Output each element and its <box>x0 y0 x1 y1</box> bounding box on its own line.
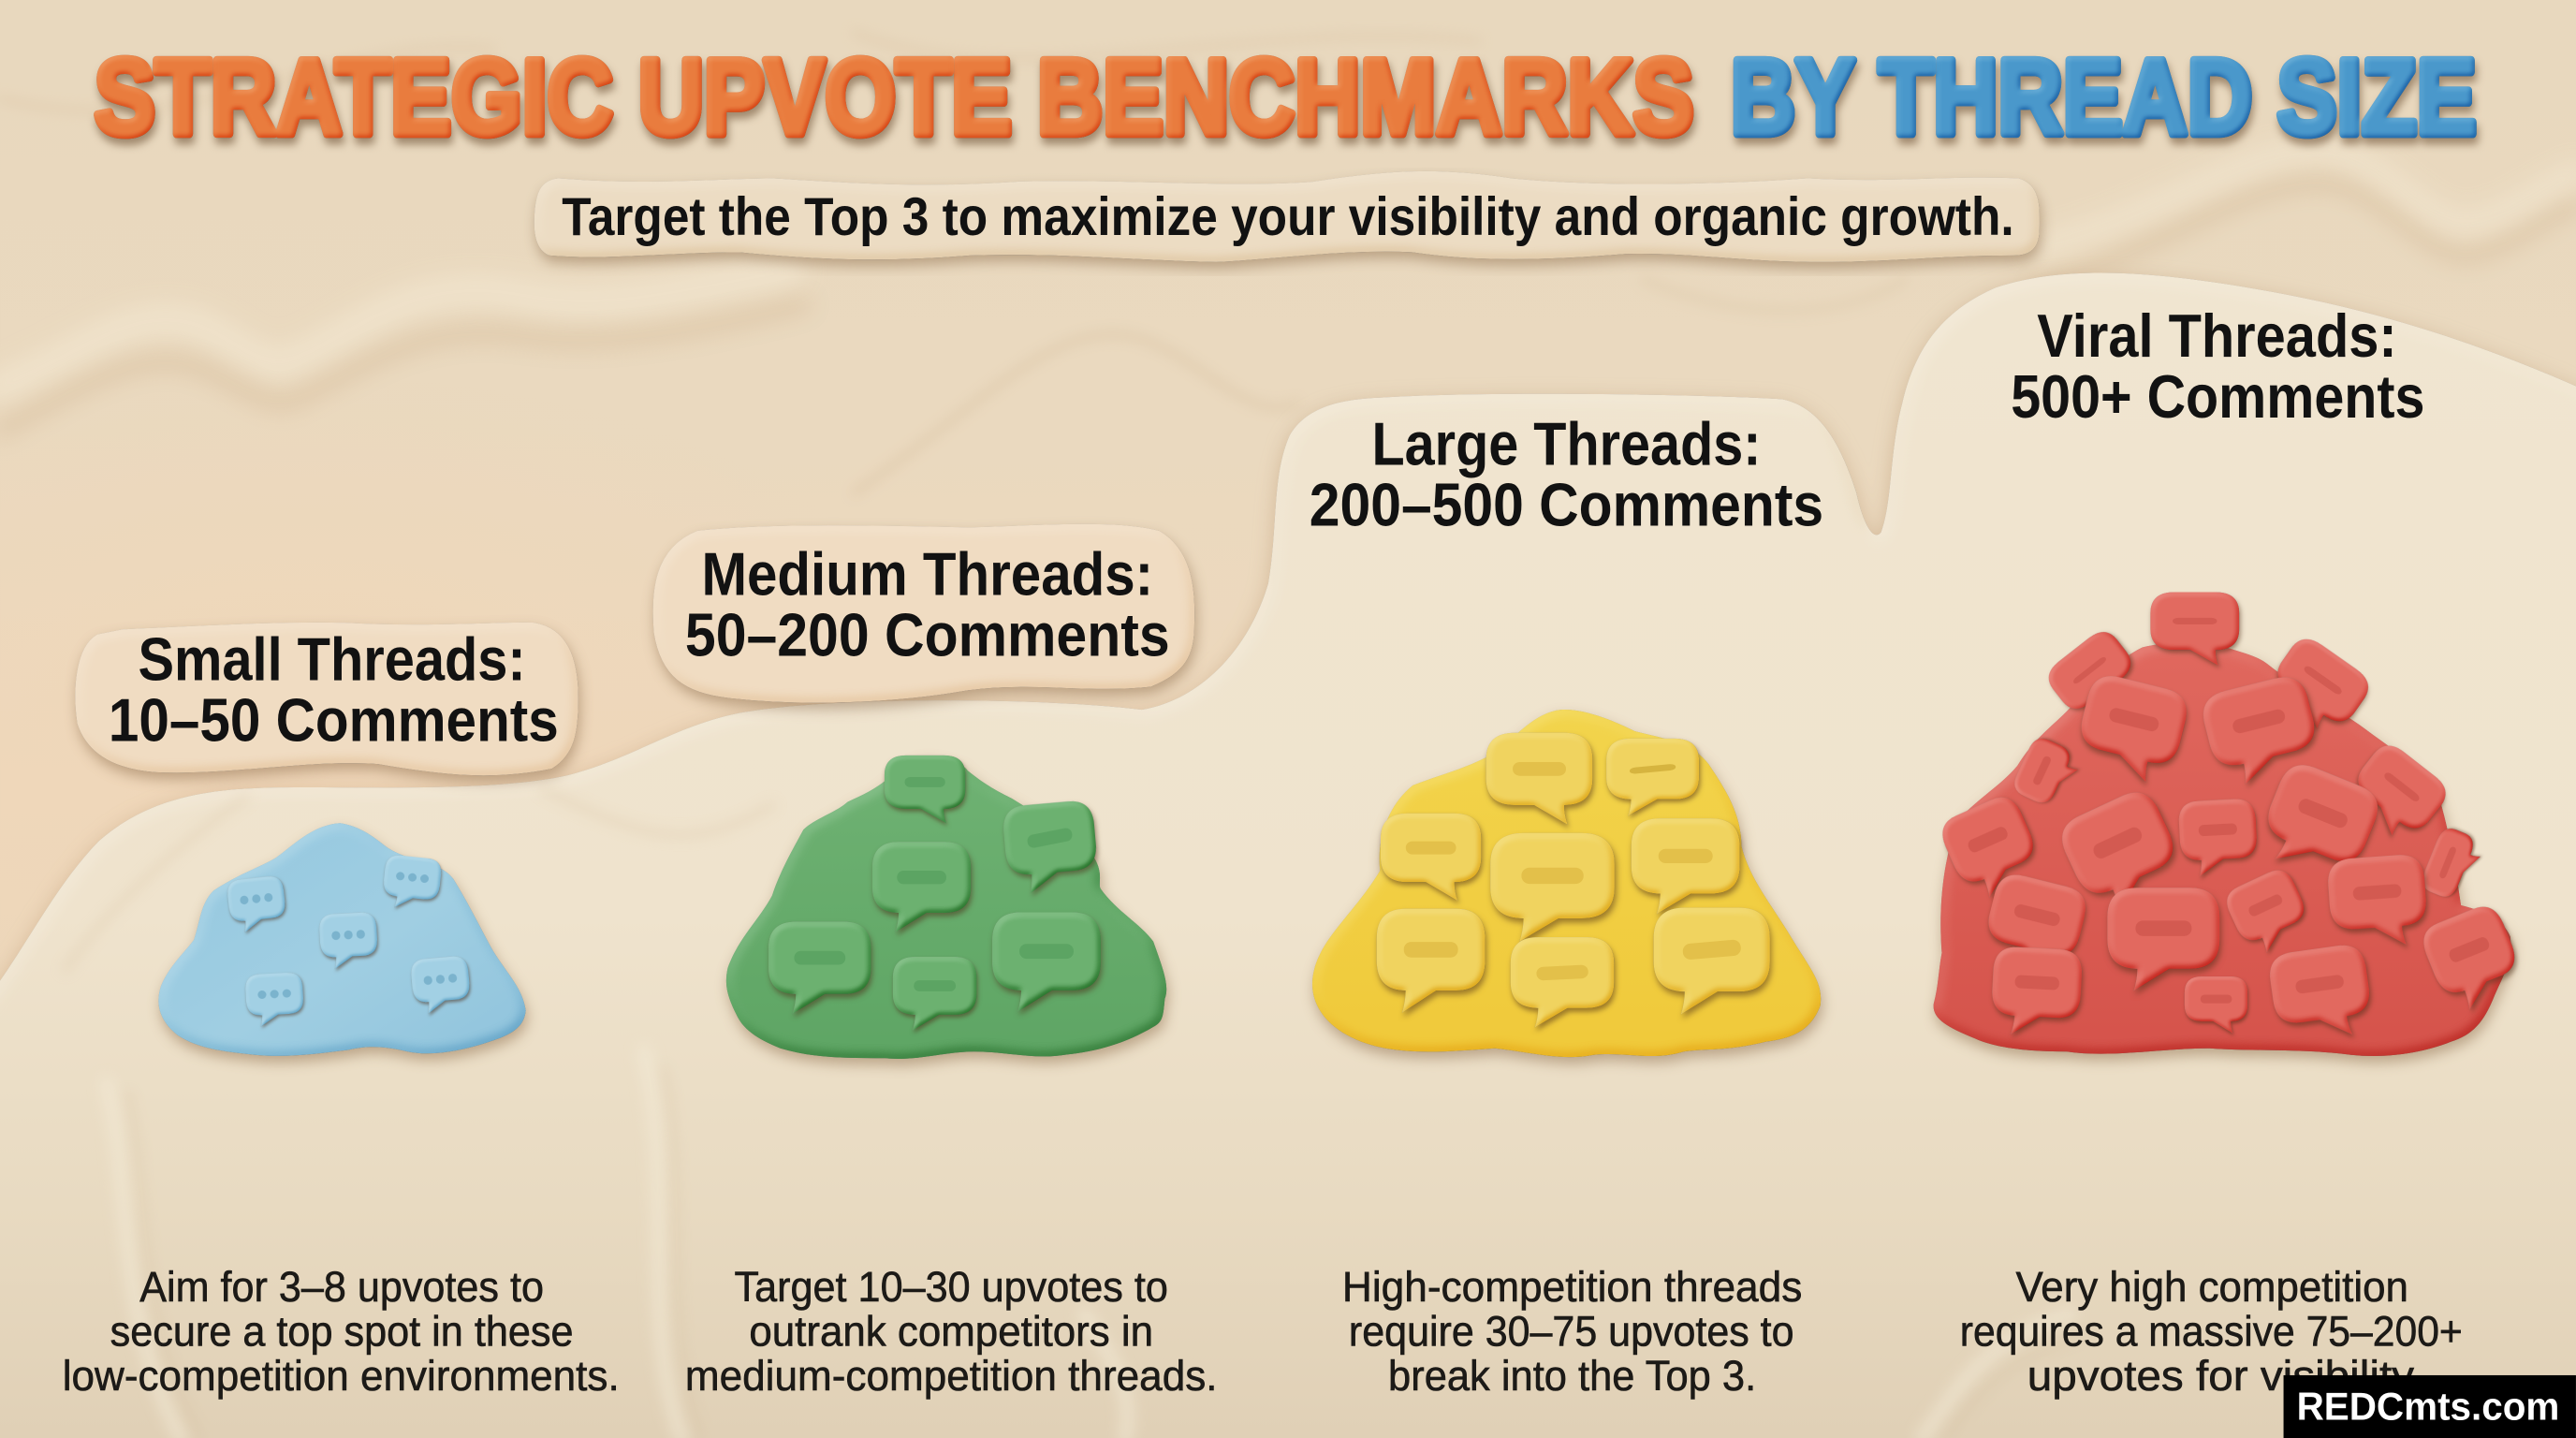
medium threads heading: Medium Threads: <box>701 539 1153 608</box>
large threads heading: 200–500 Comments <box>1310 471 1823 539</box>
viral threads heading <box>2011 301 2424 431</box>
icon: yellow clay mound with speech bubbles <box>1312 710 1821 1057</box>
icon: red clay mound with speech bubbles <box>1934 593 2528 1056</box>
medium threads heading <box>685 539 1170 668</box>
large threads heading: Large Threads: <box>1372 410 1761 478</box>
small threads description <box>63 1263 620 1400</box>
large threads description: require 30–75 upvotes to <box>1349 1307 1794 1355</box>
small threads description: low-competition environments. <box>63 1352 620 1400</box>
small threads label pill <box>79 625 575 772</box>
medium threads description: medium-competition threads. <box>685 1352 1218 1400</box>
green speech bubbles <box>768 756 1101 1031</box>
red mound <box>1934 642 2510 1056</box>
small threads description: secure a top spot in these <box>110 1307 574 1355</box>
title: orange part: STRATEGIC UPVOTE BENCHMARKS <box>95 38 1693 157</box>
foreground wrinkles <box>66 788 2086 1438</box>
yellow mound <box>1312 710 1821 1057</box>
medium threads label pill <box>656 527 1192 699</box>
blue mound <box>158 823 526 1056</box>
small threads heading: Small Threads: <box>138 625 526 694</box>
viral threads heading: 500+ Comments <box>2011 362 2424 431</box>
small threads heading: 10–50 Comments <box>109 686 559 755</box>
blue speech bubbles <box>227 854 472 1027</box>
panel: viral threads <box>1934 301 2528 1400</box>
small threads heading <box>109 625 559 755</box>
panel: large threads <box>1310 410 1823 1400</box>
subtitle text: Target the Top 3 to maximize your visibility and organic growth. <box>562 187 2014 247</box>
yellow speech bubbles <box>1377 733 1770 1027</box>
panel: medium threads <box>656 527 1218 1400</box>
large threads description: break into the Top 3. <box>1388 1352 1756 1400</box>
watermark <box>2284 1375 2576 1438</box>
subtitle pill <box>540 177 2034 257</box>
viral threads description: upvotes for visibility. <box>2027 1352 2423 1400</box>
subtitle pill shape <box>540 177 2034 257</box>
small threads description: Aim for 3–8 upvotes to <box>139 1263 544 1311</box>
large threads heading <box>1310 410 1823 539</box>
title <box>95 38 2477 157</box>
green mound <box>726 756 1166 1059</box>
watermark: REDCmts.com <box>2297 1384 2559 1428</box>
panel: small threads <box>63 625 620 1400</box>
icon: blue clay mound with speech bubbles <box>158 823 526 1056</box>
red speech bubbles <box>1936 593 2528 1045</box>
viral threads description: Very high competition <box>2015 1263 2408 1311</box>
medium threads description: Target 10–30 upvotes to <box>735 1263 1168 1311</box>
icon: green clay mound with speech bubbles <box>726 756 1166 1059</box>
medium threads heading: 50–200 Comments <box>685 600 1170 668</box>
viral threads description <box>1960 1263 2463 1400</box>
viral threads description: requires a massive 75–200+ <box>1960 1307 2463 1355</box>
large threads description <box>1342 1263 1802 1400</box>
medium threads description <box>685 1263 1218 1400</box>
viral threads heading: Viral Threads: <box>2037 301 2397 370</box>
large threads description: High-competition threads <box>1342 1263 1802 1311</box>
medium threads description: outrank competitors in <box>749 1307 1153 1355</box>
